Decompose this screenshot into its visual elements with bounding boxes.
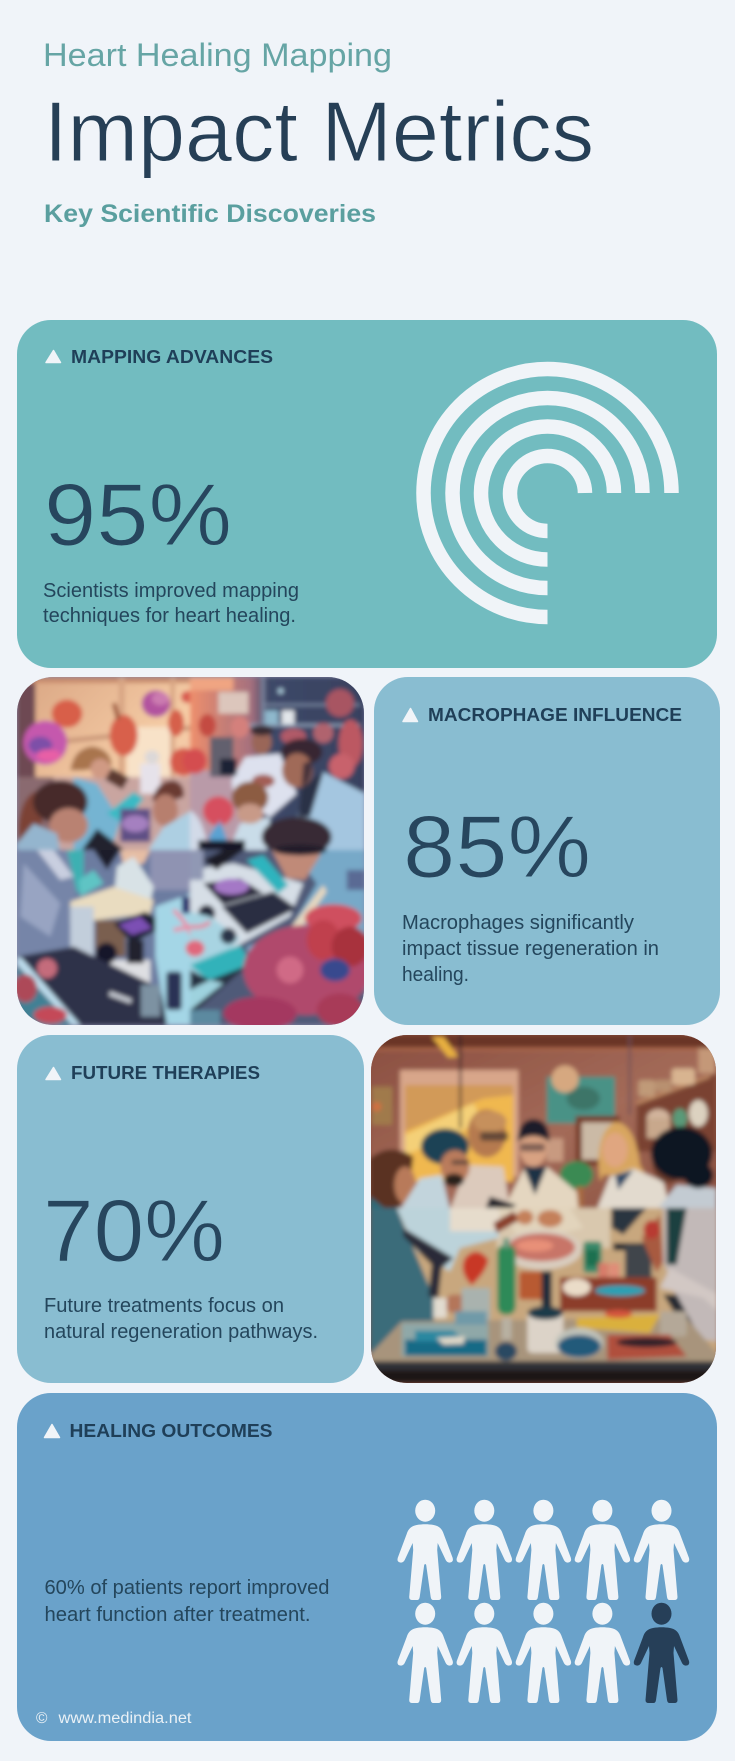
heading: MAPPING ADVANCES	[71, 347, 273, 367]
chart: concentric arcs	[423, 369, 672, 617]
main title: Impact Metrics	[44, 85, 594, 180]
icon: triangle	[44, 1424, 60, 1438]
copyright credit: www.medindia.net	[57, 1710, 192, 1727]
icon: triangle	[46, 1068, 60, 1080]
stat 85%: 85%	[403, 797, 591, 896]
image: research team around table	[370, 1035, 718, 1383]
header	[43, 37, 594, 228]
upper half	[370, 1035, 718, 1210]
stat 95%: 95%	[44, 465, 232, 564]
panel: healing outcomes	[17, 1393, 717, 1741]
subtitle: Key Scientific Discoveries	[44, 200, 376, 228]
eyebrow title: Heart Healing Mapping	[43, 37, 392, 73]
bottom left quadrant	[14, 850, 192, 1025]
description: Macrophages significantly	[402, 912, 634, 934]
heading: FUTURE THERAPIES	[71, 1063, 260, 1083]
description: impact tissue regeneration in	[402, 938, 659, 960]
panel: macrophage influence	[374, 677, 720, 1025]
description: techniques for heart healing.	[43, 605, 296, 627]
description: 60% of patients report improved	[44, 1577, 330, 1599]
stat 70%: 70%	[43, 1181, 225, 1280]
description: healing.	[402, 964, 469, 986]
image: scientists at microscopes	[14, 677, 370, 1030]
description: Future treatments focus on	[44, 1295, 284, 1317]
icon: triangle	[403, 708, 418, 722]
bottom right quadrant	[186, 845, 370, 1030]
lower half	[370, 1208, 718, 1383]
description: natural regeneration pathways.	[44, 1321, 318, 1343]
heading: HEALING OUTCOMES	[70, 1421, 272, 1441]
panel: future therapies	[17, 1035, 364, 1383]
copyright credit: ©	[36, 1710, 48, 1727]
top right quadrant	[183, 677, 365, 857]
description: heart function after treatment.	[44, 1604, 310, 1626]
icon: triangle	[46, 350, 60, 362]
top left quadrant	[17, 677, 198, 852]
panel: mapping advances	[17, 320, 717, 668]
description: Scientists improved mapping	[43, 580, 299, 602]
heading: MACROPHAGE INFLUENCE	[428, 705, 682, 725]
chart: people pictogram	[397, 1500, 689, 1703]
